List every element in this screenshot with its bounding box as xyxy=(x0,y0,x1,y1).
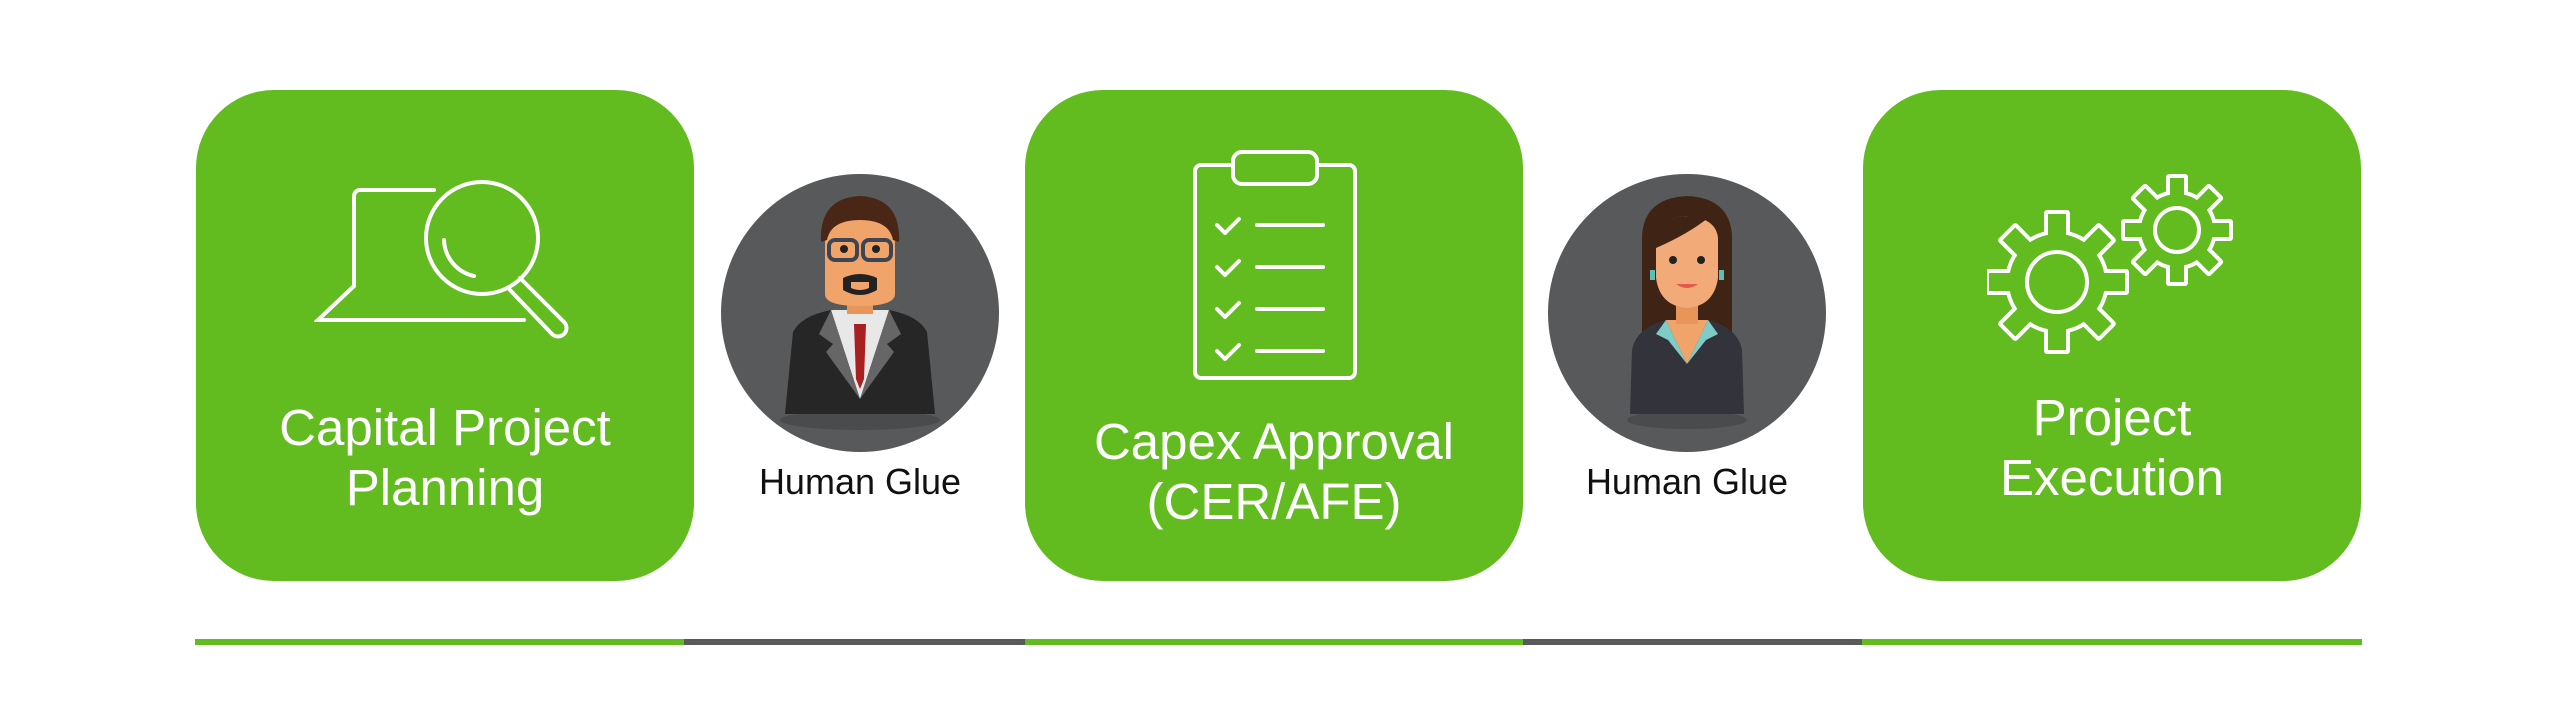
avatar: man xyxy=(721,174,999,452)
icon: gears xyxy=(1987,174,2233,354)
heading: Project Execution xyxy=(2000,389,2224,506)
label: Human Glue 1: Human Glue xyxy=(759,461,961,502)
heading: Capex Approval (CER/AFE): (CER/AFE) xyxy=(1146,473,1402,530)
timeline bar xyxy=(195,639,2362,645)
heading: Project Execution: Execution xyxy=(2000,449,2224,506)
panel: project execution xyxy=(1863,90,2361,581)
heading: Capital Project Planning xyxy=(279,399,611,516)
icon: clipboard checklist xyxy=(1193,150,1357,380)
heading: Capital Project Planning: Capital Project xyxy=(279,399,611,456)
heading: Capex Approval (CER/AFE): Capex Approval xyxy=(1094,413,1454,470)
heading: Project Execution: Project xyxy=(2033,389,2191,446)
heading: Capex Approval (CER/AFE) xyxy=(1094,413,1454,530)
heading: Capital Project Planning: Planning xyxy=(346,459,544,516)
panel: capital project planning xyxy=(196,90,694,581)
panel: capex approval xyxy=(1025,90,1523,581)
label: Human Glue 2: Human Glue xyxy=(1586,461,1788,502)
icon: laptop with magnifier xyxy=(314,180,568,338)
avatar: woman xyxy=(1548,174,1826,452)
